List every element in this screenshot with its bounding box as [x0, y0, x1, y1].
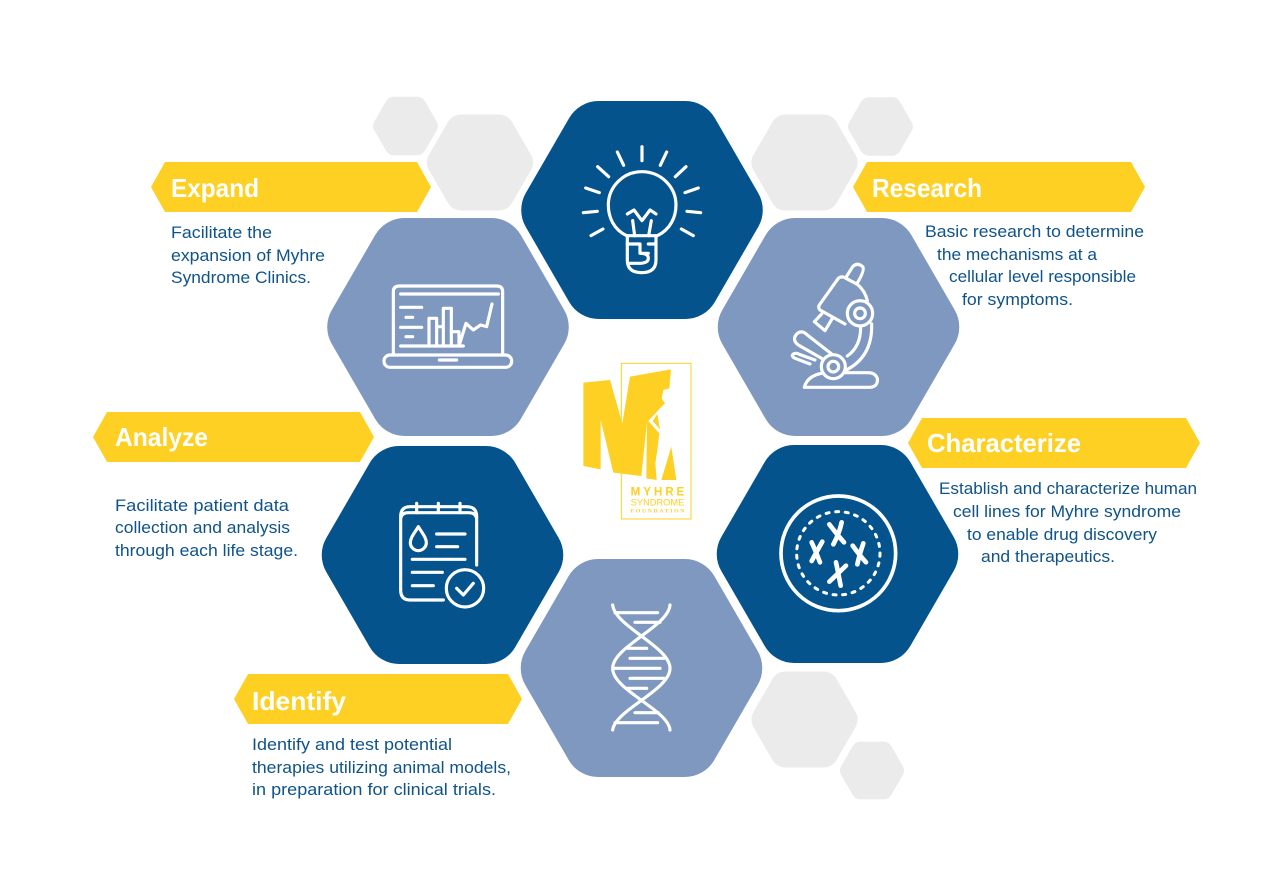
text: Analyze description: Facilitate patient data: [115, 496, 290, 515]
icon: laptop with charts: [384, 286, 512, 367]
logo: Myhre Syndrome Foundation: [583, 363, 691, 519]
ribbon: Analyze: [93, 412, 374, 462]
ribbon: Identify: [234, 674, 522, 724]
hexagon panel: light bulb: [521, 101, 763, 319]
text: Characterize description: and therapeutics.: [981, 547, 1115, 566]
logo: Myhre Syndrome Foundation: FOUNDATION: [631, 508, 685, 514]
text: Characterize description: Establish and characterize human: [939, 479, 1197, 498]
text: Identify description: therapies utilizing animal models,: [252, 758, 511, 777]
hexagon panel: chromosomes: [717, 445, 958, 663]
text: Characterize description: to enable drug discovery: [967, 525, 1158, 544]
icon: light bulb: [583, 147, 701, 273]
text: Characterize description: [939, 479, 1197, 566]
icon: cell with chromosomes: [781, 496, 896, 611]
ribbon: Research: [853, 162, 1145, 212]
text: Analyze description: collection and analysis: [115, 518, 290, 537]
text: Characterize description: cell lines for Myhre syndrome: [953, 502, 1181, 521]
text: Analyze description: through each life stage.: [115, 541, 298, 560]
heading: Expand: Expand: [171, 173, 259, 203]
ribbon: Expand: [151, 162, 431, 212]
block: Characterize: [908, 418, 1200, 566]
text: Research description: [925, 222, 1144, 309]
heading: Analyze: Analyze: [115, 422, 208, 452]
text: Research description: for symptoms.: [962, 290, 1073, 309]
hexagon panel: microscope: [718, 218, 959, 436]
decorative grey hexagons: bottom right: [751, 672, 904, 799]
text: Identify description: in preparation for clinical trials.: [252, 780, 496, 799]
text: Expand description: expansion of Myhre: [171, 246, 325, 265]
text: Research description: cellular level responsible: [949, 267, 1136, 286]
hexagon panel: patient data calendar: [322, 446, 563, 664]
block: Expand: [151, 162, 431, 287]
icon: DNA helix: [613, 605, 670, 730]
text: Identify description: [252, 735, 511, 799]
heading: Characterize: Characterize: [927, 428, 1081, 458]
text: Expand description: Facilitate the: [171, 223, 272, 242]
hexagon panel: DNA: [521, 559, 762, 777]
icon: microscope: [792, 264, 877, 387]
text: Analyze description: [115, 496, 298, 560]
decorative grey hexagons: top right: [751, 97, 913, 210]
ribbon: Characterize: [908, 418, 1200, 468]
decorative grey hexagons: top left: [373, 97, 533, 210]
text: Expand description: [171, 223, 325, 287]
logo: Myhre Syndrome Foundation: SYNDROME: [631, 498, 684, 508]
block: Identify: [234, 674, 522, 799]
text: Research description: the mechanisms at a: [937, 245, 1098, 264]
text: Expand description: Syndrome Clinics.: [171, 268, 311, 287]
text: Identify description: Identify and test potential: [252, 735, 452, 754]
block: Analyze: [93, 412, 374, 560]
heading: Identify: Identify: [252, 686, 347, 716]
hexagon panel: laptop: [327, 218, 569, 436]
logo: Myhre Syndrome Foundation: MYHRE: [631, 486, 685, 499]
text: Research description: Basic research to determine: [925, 222, 1144, 241]
block: Research: [853, 162, 1145, 309]
icon: calendar with water drop and check: [401, 503, 484, 607]
heading: Research: Research: [872, 173, 982, 203]
